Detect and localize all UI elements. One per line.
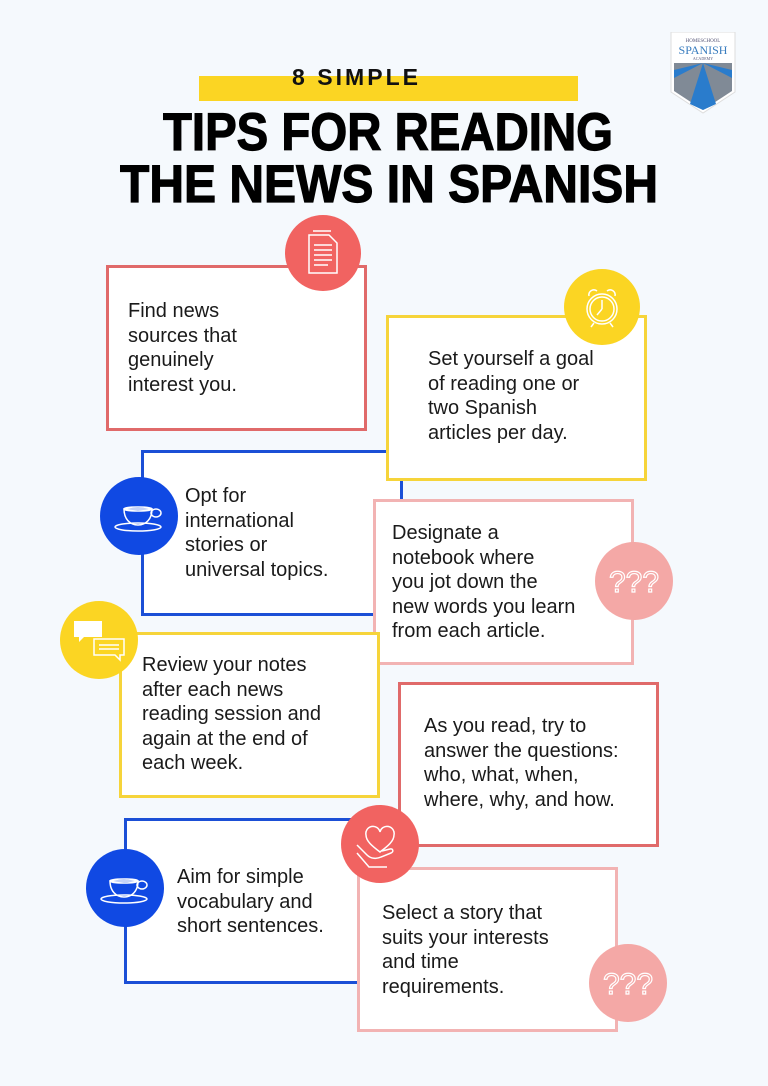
text: tip 5 [142, 654, 321, 774]
text: tip 1: interest you. [128, 374, 237, 396]
icon: question marks: ??? [609, 566, 659, 599]
logo: HOMESCHOOL [686, 39, 720, 44]
text: tip 4 [392, 522, 575, 642]
text: tip 2: Set yourself a goal [428, 348, 594, 370]
logo: ACADEMY [693, 56, 713, 61]
text: tip 5: each week. [142, 752, 243, 774]
icon: question marks [595, 542, 673, 620]
text: tip 1: genuinely [128, 349, 214, 371]
text: tip 7 [177, 866, 324, 937]
panel: tip 8 [357, 867, 618, 1032]
icon: teacup 2 [86, 849, 164, 927]
icon: chat bubbles [60, 601, 138, 679]
text: tip 7: vocabulary and [177, 890, 313, 912]
text: tip 2: two Spanish [428, 397, 537, 419]
text: tip 4: from each article. [392, 620, 545, 642]
text: tip 8: suits your interests [382, 926, 549, 948]
icon: heart in hand [341, 805, 419, 883]
text: tip 3: stories or [185, 534, 267, 556]
panel: tip 2 [386, 315, 647, 481]
text: tip 1 [128, 300, 237, 396]
text: tip 8: requirements. [382, 976, 504, 998]
icon: question marks 2 [589, 944, 667, 1022]
text: tip 5: Review your notes [142, 654, 307, 676]
text: tip 3: Opt for [185, 485, 246, 507]
text: tip 3: international [185, 510, 294, 532]
text: tip 2 [428, 348, 594, 444]
title: 8 SIMPLE [292, 64, 418, 90]
title [120, 64, 658, 210]
text: tip 8: and time [382, 951, 459, 973]
text: tip 7: short sentences. [177, 915, 324, 937]
text: tip 1: sources that [128, 324, 237, 346]
panel: tip 1 [106, 265, 367, 431]
text: tip 5: reading session and [142, 703, 321, 725]
panel: tip 3 [141, 450, 403, 616]
text: tip 3: universal topics. [185, 558, 328, 580]
text: tip 4: new words you learn [392, 596, 575, 618]
text: tip 5: again at the end of [142, 728, 308, 750]
text: tip 4: you jot down the [392, 571, 538, 593]
icon: document [285, 215, 361, 291]
panel: tip 4 [373, 499, 634, 665]
text: tip 2: articles per day. [428, 422, 568, 444]
text: tip 3 [185, 485, 328, 580]
icon: teacup [100, 477, 178, 555]
text: tip 1: Find news [128, 300, 219, 322]
text: tip 8 [382, 902, 549, 998]
icon: question marks 2: ??? [603, 968, 653, 1001]
text: tip 6: As you read, try to [424, 715, 586, 737]
logo [670, 32, 736, 114]
text: tip 2: of reading one or [428, 372, 579, 394]
panel: tip 7 [124, 818, 386, 984]
panel: tip 6 [398, 682, 659, 847]
logo: SPANISH [679, 43, 728, 57]
text: tip 4: notebook where [392, 546, 534, 568]
text: tip 6: who, what, when, [424, 764, 579, 786]
title: TIPS FOR READING [163, 103, 613, 162]
text: tip 5: after each news [142, 678, 283, 700]
icon: clock [564, 269, 640, 345]
text: tip 6 [424, 715, 619, 810]
text: tip 7: Aim for simple [177, 866, 304, 888]
panel: tip 5 [119, 632, 380, 798]
text: tip 4: Designate a [392, 522, 499, 544]
text: tip 6: where, why, and how. [424, 788, 615, 810]
text: tip 8: Select a story that [382, 902, 542, 924]
text: tip 6: answer the questions: [424, 740, 619, 762]
